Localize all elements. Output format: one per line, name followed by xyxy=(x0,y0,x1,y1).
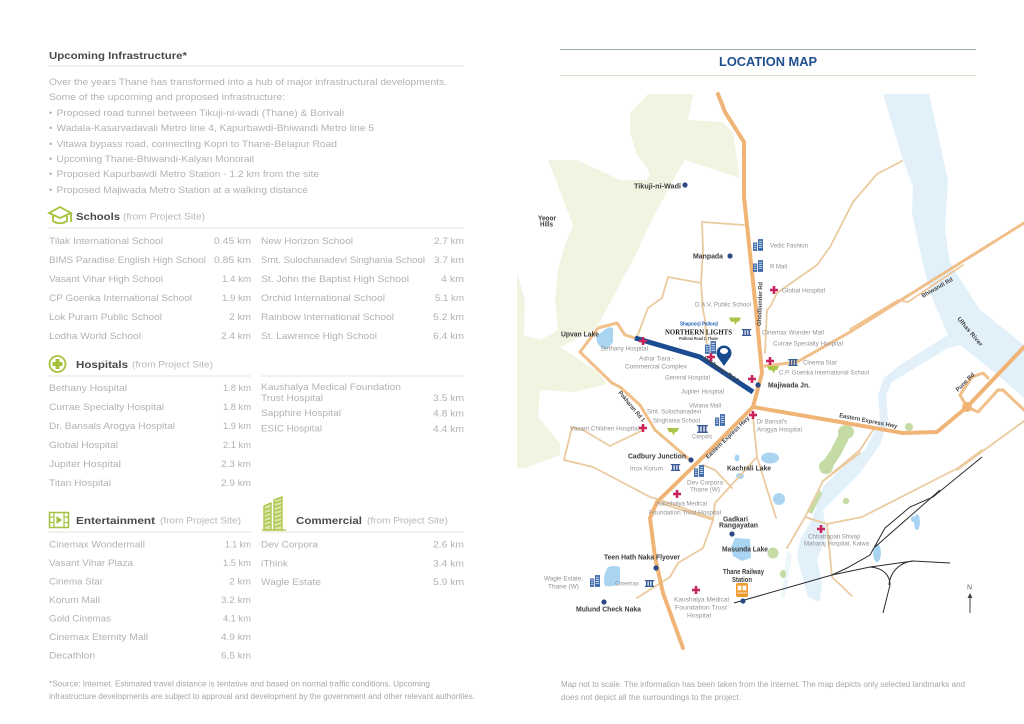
list: entertainment venues: Decathlon xyxy=(49,650,95,662)
map: road labels: Pokharan Rd 2 xyxy=(702,356,740,385)
map: bold place names: Cadbury Junction xyxy=(628,454,686,460)
map: landmark labels: Cinema Star xyxy=(803,359,838,366)
list: schools left column: Tilak International School xyxy=(49,236,163,247)
text block: infrastructure list: Over the years Thane has transformed into a hub of major infrastructural developments. xyxy=(49,77,447,88)
panel: schools xyxy=(48,207,464,342)
map: landmark labels: Global Hospital xyxy=(782,287,826,294)
list: hospitals left column: 1.8 km xyxy=(223,402,251,413)
heading: commercial: (from Project Site) xyxy=(367,516,448,526)
list: entertainment venues: Vasant Vihar Plaza xyxy=(49,558,134,569)
list: entertainment venues: 2 km xyxy=(229,576,251,588)
map: landmark labels: Wagle Estate, xyxy=(544,575,583,582)
map: location map xyxy=(517,94,1024,648)
list: entertainment venues: Korum Mall xyxy=(49,595,100,606)
map: landmark labels: Singhania School xyxy=(653,417,700,424)
list: schools left column xyxy=(49,236,251,342)
map: landmark labels: Thane (W) xyxy=(548,583,579,590)
map: lakes xyxy=(596,327,920,586)
list: schools right column xyxy=(261,236,464,342)
list: schools left column: 1.9 km xyxy=(222,293,251,304)
heading: schools: Schools xyxy=(76,211,120,223)
map: pokhran road 2 highlight xyxy=(635,338,753,392)
panel: hospitals xyxy=(48,356,464,489)
map: landmark labels: Vedic Fashion xyxy=(770,242,808,249)
list: hospitals left column: 2.3 km xyxy=(221,459,251,470)
map: project logo text: NORTHERN LIGHTS xyxy=(665,328,732,336)
footnote: map disclaimer: does not depict all the surroundings to the project. xyxy=(561,693,741,702)
text block: infrastructure list: Some of the upcoming and proposed infrastructure: xyxy=(49,92,285,103)
map: bold place names: Rangayatan xyxy=(719,522,758,530)
list: hospitals right column: Trust Hospital xyxy=(261,393,323,404)
list: hospitals left column: Dr. Bansals Arogya Hospital xyxy=(49,421,175,432)
map: place dots xyxy=(601,182,761,605)
map: landmark labels: C.P. Goenka International School xyxy=(779,369,869,376)
icon: north arrow xyxy=(967,584,972,613)
text block: infrastructure list: • xyxy=(49,123,52,134)
text block: infrastructure list: • xyxy=(49,185,52,196)
map: project logo text: Shapoorji Pallonji xyxy=(680,322,718,328)
map: landmark labels: Dev Corpora xyxy=(687,479,723,486)
list: schools left column: 0.85 km xyxy=(214,255,251,266)
list: schools left column: Lok Puram Public School xyxy=(49,312,162,323)
list: commercial places: Wagle Estate xyxy=(261,577,321,588)
map: landmark labels: Chhatrapati Shivaji xyxy=(808,533,860,540)
map: landmark labels: Cinepolis xyxy=(692,433,713,440)
list: commercial places: 3.4 km xyxy=(433,558,464,570)
map: landmark labels: Hospital xyxy=(687,612,712,619)
list: schools right column: Rainbow International School xyxy=(261,312,394,323)
list: hospitals left column: 1.9 km xyxy=(223,421,251,432)
list: schools left column: 2.4 km xyxy=(221,331,251,342)
map: road labels: Pune Rd xyxy=(955,372,977,393)
list: schools right column: St. John the Baptist High School xyxy=(261,274,409,285)
list: hospitals left column: 1.8 km xyxy=(223,383,251,394)
list: schools right column: 6.4 km xyxy=(433,331,464,342)
list: commercial places xyxy=(261,539,464,588)
map: landmark labels: Maharaj Hospital, Kalwa xyxy=(804,540,869,547)
list: entertainment venues: 4.1 km xyxy=(223,614,251,624)
text block: infrastructure list: Upcoming Thane-Bhiwandi-Kalyan Monorail xyxy=(56,154,254,165)
map: landmark labels: Smt. Sulochanadevi xyxy=(647,408,701,415)
text block: infrastructure list: Proposed road tunnel between Tikuji-ni-wadi (Thane) & Borivali xyxy=(56,108,344,119)
map: landmark labels: Cinemax Wonder Mall xyxy=(762,329,825,336)
footnote: source xyxy=(49,680,475,701)
list: schools left column: 2 km xyxy=(229,312,251,323)
list: schools right column: 2.7 km xyxy=(434,236,464,247)
footnote: map disclaimer xyxy=(561,680,965,702)
list: entertainment venues xyxy=(49,539,251,662)
heading: entertainment xyxy=(76,515,241,527)
list: hospitals left column: Jupiter Hospital xyxy=(49,459,121,470)
icon: north arrow: N xyxy=(967,584,972,592)
map: bold place names: Majiwada Jn. xyxy=(768,382,810,390)
map: bold place names: Masunda Lake xyxy=(722,546,768,554)
text block: infrastructure list: • xyxy=(49,108,52,119)
list: entertainment venues: 1.1 km xyxy=(225,539,251,550)
map: bold place names: Tikuji-ni-Wadi xyxy=(634,184,681,190)
text block: infrastructure list xyxy=(49,77,447,196)
list: schools right column: 4 km xyxy=(441,274,464,285)
list: schools right column: 5.2 km xyxy=(433,312,464,323)
map: bold place names: Gadkari xyxy=(723,516,748,524)
map: bold place names: Thane Railway xyxy=(723,569,764,576)
map: road labels: Pokharan Rd 1 xyxy=(616,390,646,424)
list: hospitals left column: Bethany Hospital xyxy=(49,383,127,394)
text block: infrastructure list: Vitawa bypass road, connecting Kopri to Thane-Belapur Road xyxy=(56,139,337,150)
map: building icons xyxy=(590,239,763,587)
list: entertainment venues: 4.9 km xyxy=(221,632,251,643)
map: thin local roads xyxy=(564,161,1024,598)
list: schools right column: St. Lawrence High School xyxy=(261,331,377,342)
footnote: source: infrastructure developments are subject to approval and development by the government and other relevant authorities. xyxy=(49,692,475,701)
icon: hospital cross xyxy=(50,356,66,372)
map: landmark labels: Jupiter Hospital xyxy=(681,388,724,395)
map: landmark labels: Vasant Children Hospital xyxy=(570,425,639,432)
map: cinema icons xyxy=(645,329,798,587)
heading: location map: LOCATION MAP xyxy=(719,55,817,69)
map: bold place names: Hills xyxy=(540,222,553,228)
map: green hills xyxy=(517,94,740,468)
list: schools left column: 1.4 km xyxy=(222,274,251,285)
list: entertainment venues: 1.5 km xyxy=(223,558,251,569)
map: landmark labels: Thane (W) xyxy=(690,486,720,493)
list: schools left column: CP Goenka International School xyxy=(49,293,192,304)
map: bold place names: Upvan Lake xyxy=(561,332,599,338)
map: rivers and creek xyxy=(781,94,1024,602)
list: hospitals right column: 3.5 km xyxy=(433,393,464,404)
text block: infrastructure list: • xyxy=(49,169,52,180)
list: hospitals right column: ESIC Hospital xyxy=(261,424,322,434)
map: hospital crosses xyxy=(639,286,825,594)
icon: graduation cap xyxy=(49,207,71,223)
list: schools left column: BIMS Paradise English High School xyxy=(49,255,206,266)
panel: entertainment xyxy=(48,512,251,662)
heading: entertainment: (from Project Site) xyxy=(160,516,241,526)
heading: schools xyxy=(76,211,205,223)
list: hospitals left column: 2.1 km xyxy=(223,440,251,451)
list: schools right column: 3.7 km xyxy=(434,255,464,266)
map: landmark labels: Inox Korum xyxy=(630,465,663,472)
list: hospitals right column: Sapphire Hospital xyxy=(261,408,341,419)
map: landmark labels: Kaushalya Medical xyxy=(657,500,707,507)
map: landmark labels: Foundation Trust xyxy=(675,604,727,611)
map: landmark labels: Commercial Complex xyxy=(625,363,688,370)
map: landmark labels: Ashar Tiara - xyxy=(639,355,674,362)
map: landmark labels: Foundation Trust Hospital xyxy=(649,509,722,516)
text block: infrastructure list: Proposed Majiwada Metro Station at a walking distance xyxy=(56,185,308,196)
panel: commercial xyxy=(261,497,464,588)
list: schools right column: New Horizon School xyxy=(261,236,353,247)
map: road labels: Eastern Express Hwy xyxy=(705,415,752,460)
icon: project location pin xyxy=(716,346,732,366)
list: hospitals right column: 4.4 km xyxy=(433,424,464,435)
panel: upcoming infrastructure xyxy=(48,50,464,196)
list: entertainment venues: 6.5 km xyxy=(221,650,251,662)
list: commercial places: Dev Corpora xyxy=(261,539,319,550)
list: entertainment venues: 3.2 km xyxy=(221,595,251,606)
heading: hospitals xyxy=(76,359,213,371)
map: landmark labels: Arogya Hospital xyxy=(757,426,803,433)
map: landmark labels: Kaushalya Medical xyxy=(674,596,730,603)
icon: film strip xyxy=(49,512,69,528)
map: secondary roads xyxy=(580,223,1024,460)
list: schools left column: 0.45 km xyxy=(214,236,251,247)
heading: commercial xyxy=(296,515,448,527)
icon: commercial towers xyxy=(262,497,286,530)
map: landmark labels: Dr Bansal's xyxy=(757,418,788,425)
list: commercial places: iThink xyxy=(261,558,288,570)
footnote: map disclaimer: Map not to scale. The information has been taken from the internet. The map depicts only selected landmarks and xyxy=(561,680,965,689)
map: landmark labels: Currae Specialty Hospital xyxy=(773,340,843,347)
map: road labels: Bhiwandi Rd xyxy=(921,277,955,300)
map: bold place names: Teen Hath Naka Flyover xyxy=(604,554,680,562)
heading: entertainment: Entertainment xyxy=(76,515,156,527)
map: landmark labels: Bethany Hospital xyxy=(601,345,648,352)
map: landmark labels: Viviana Mall xyxy=(689,402,721,409)
map: bold place names: Station xyxy=(732,577,752,584)
text block: infrastructure list: • xyxy=(49,154,52,165)
list: hospitals right column xyxy=(261,382,464,435)
list: entertainment venues: Cinemax Wondermall xyxy=(49,539,145,550)
map: green patches xyxy=(768,423,913,578)
map: project logo text xyxy=(665,322,732,341)
heading: upcoming infrastructure: Upcoming Infrastructure* xyxy=(49,50,188,62)
list: hospitals right column: 4.8 km xyxy=(433,408,464,420)
list: hospitals left column xyxy=(49,383,251,489)
list: commercial places: 5.9 km xyxy=(433,577,464,588)
map: bold place names: Yeoor xyxy=(538,216,556,222)
list: schools left column: Vasant Vihar High School xyxy=(49,274,163,285)
list: schools right column: Orchid International School xyxy=(261,293,385,304)
list: entertainment venues: Gold Cinemas xyxy=(49,614,111,624)
heading: schools: (from Project Site) xyxy=(123,212,205,222)
list: hospitals left column: Currae Specialty Hospital xyxy=(49,402,164,413)
map: bold place names: Mulund Check Naka xyxy=(576,606,641,614)
map: school icons xyxy=(667,318,779,436)
list: commercial places: 2.6 km xyxy=(433,539,464,550)
map: road labels xyxy=(616,277,984,460)
map: road labels: Ghodbunder Rd xyxy=(757,282,765,326)
list: schools right column: Smt. Sulochanadevi Singhania School xyxy=(261,255,425,266)
list: schools left column: Lodha World School xyxy=(49,331,141,342)
list: hospitals left column: Titan Hospital xyxy=(49,478,111,489)
map: railway lines xyxy=(734,457,982,613)
list: schools right column: 5.1 km xyxy=(435,293,464,304)
map: road labels: Eastern Express Hwy xyxy=(839,413,898,430)
map: landmark labels: General Hospital xyxy=(665,374,710,381)
text block: infrastructure list: Wadala-Kasarvadavali Metro line 4, Kapurbawdi-Bhiwandi Metro line 5 xyxy=(56,123,374,134)
map: project logo text: Pokhran Road 2, Thane xyxy=(679,336,718,341)
footnote: source: *Source: Internet. Estimated travel distance is tentative and based on normal traffic conditions. Upcoming xyxy=(49,680,430,688)
map: bold place names: Manpada xyxy=(693,254,723,260)
map: bold place names xyxy=(538,184,810,614)
list: hospitals left column: Global Hospital xyxy=(49,440,118,451)
text block: infrastructure list: Proposed Kapurbawdi Metro Station - 1.2 km from the site xyxy=(56,169,319,180)
map: road labels: Ulhas River xyxy=(955,316,984,348)
icon: railway station xyxy=(736,583,748,597)
list: entertainment venues: Cinemax Eternity Mall xyxy=(49,632,148,643)
map: landmark labels: D.A.V. Public School xyxy=(695,301,751,308)
list: hospitals left column: 2.9 km xyxy=(221,478,251,489)
map: landmark labels: Cinemax xyxy=(615,580,640,587)
list: hospitals right column: Kaushalya Medical Foundation xyxy=(261,382,401,393)
heading: hospitals: (from Project Site) xyxy=(132,360,213,370)
map: landmark labels: R Mall xyxy=(770,263,787,270)
map: main highways xyxy=(650,94,1024,648)
list: entertainment venues: Cinema Star xyxy=(49,576,103,588)
map: landmark labels xyxy=(544,242,869,619)
heading: hospitals: Hospitals xyxy=(76,359,128,371)
map: bold place names: Kachrali Lake xyxy=(727,466,771,472)
text block: infrastructure list: • xyxy=(49,139,52,150)
heading: commercial: Commercial xyxy=(296,515,362,527)
